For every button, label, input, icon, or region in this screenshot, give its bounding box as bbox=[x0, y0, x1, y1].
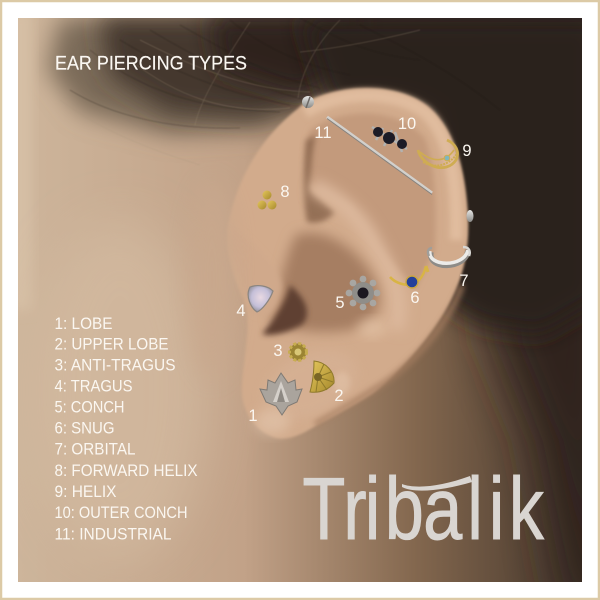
icon: industrial bar bbox=[302, 96, 432, 194]
upper fossa shadow bbox=[304, 135, 335, 223]
logo: Tribalik: Tribalik bbox=[302, 459, 544, 558]
legend item 5: 5: CONCH bbox=[54, 398, 124, 416]
legend item 8: 8: FORWARD HELIX bbox=[54, 461, 198, 480]
intertragic notch shadow bbox=[262, 285, 307, 335]
legend item 7: 7: ORBITAL bbox=[54, 440, 136, 458]
legend item 11: 11: INDUSTRIAL bbox=[54, 524, 172, 544]
hair: outer soft zone bbox=[48, 18, 340, 135]
number 7: 7 bbox=[459, 272, 469, 290]
icon: far helix stud bbox=[466, 210, 474, 222]
number 4: 4 bbox=[236, 302, 246, 320]
number 2: 2 bbox=[334, 387, 344, 405]
number 11: 11 bbox=[314, 124, 332, 142]
legend item 1: 1: LOBE bbox=[54, 314, 112, 333]
antihelix ridge bbox=[312, 186, 399, 330]
helix highlight bbox=[305, 96, 456, 240]
ear silhouette bbox=[227, 88, 468, 439]
hair: darkest zone bbox=[210, 18, 360, 95]
hair strands bbox=[70, 25, 302, 129]
bright lobe underside bbox=[254, 409, 290, 435]
lower ear edge shading bbox=[315, 285, 462, 424]
icon: lobe lotus bbox=[260, 373, 302, 415]
hair: inner dark zone bbox=[100, 18, 350, 118]
number 1: 1 bbox=[248, 407, 258, 425]
icon: snug ring bbox=[390, 266, 428, 288]
number 6: 6 bbox=[410, 289, 420, 307]
legend list bbox=[54, 314, 198, 544]
legend item 2: 2: UPPER LOBE bbox=[54, 334, 168, 354]
title: EAR PIERCING TYPES bbox=[55, 52, 247, 74]
lower face glow bbox=[78, 242, 210, 538]
far left light strip bbox=[18, 18, 32, 302]
icon: outer conch jewel bbox=[372, 127, 407, 152]
icon: forward helix studs bbox=[258, 190, 276, 210]
hair behind ear bbox=[308, 18, 538, 340]
number 9: 9 bbox=[462, 142, 472, 160]
light hair strands bbox=[130, 20, 420, 118]
number 3: 3 bbox=[273, 342, 283, 360]
icon: conch stud bbox=[346, 276, 380, 310]
legend item 10: 10: OUTER CONCH bbox=[54, 503, 188, 522]
bright lobe spot bbox=[335, 374, 349, 392]
scapha fossa bbox=[306, 113, 436, 290]
tragus bbox=[268, 278, 284, 312]
icon: anti-tragus flower bbox=[290, 344, 306, 360]
icon: orbital ring bbox=[428, 247, 470, 265]
icon: helix ring bbox=[418, 140, 458, 168]
legend item 3: 3: ANTI-TRAGUS bbox=[54, 356, 176, 374]
concha bbox=[270, 233, 379, 332]
ear-to-face blend bbox=[188, 180, 236, 380]
icon: upper lobe fan bbox=[310, 361, 334, 392]
lobe light bbox=[252, 337, 368, 433]
number 8: 8 bbox=[280, 183, 290, 201]
legend item 6: 6: SNUG bbox=[54, 418, 114, 438]
piercing numbers bbox=[236, 115, 472, 425]
legend item 9: 9: HELIX bbox=[54, 482, 116, 501]
icon: tragus opal bbox=[248, 286, 273, 312]
legend item 4: 4: TRAGUS bbox=[54, 376, 132, 396]
number 10: 10 bbox=[398, 115, 416, 133]
bright antihelix spot bbox=[358, 319, 386, 337]
number 5: 5 bbox=[335, 294, 345, 312]
right side hair bbox=[206, 18, 582, 582]
